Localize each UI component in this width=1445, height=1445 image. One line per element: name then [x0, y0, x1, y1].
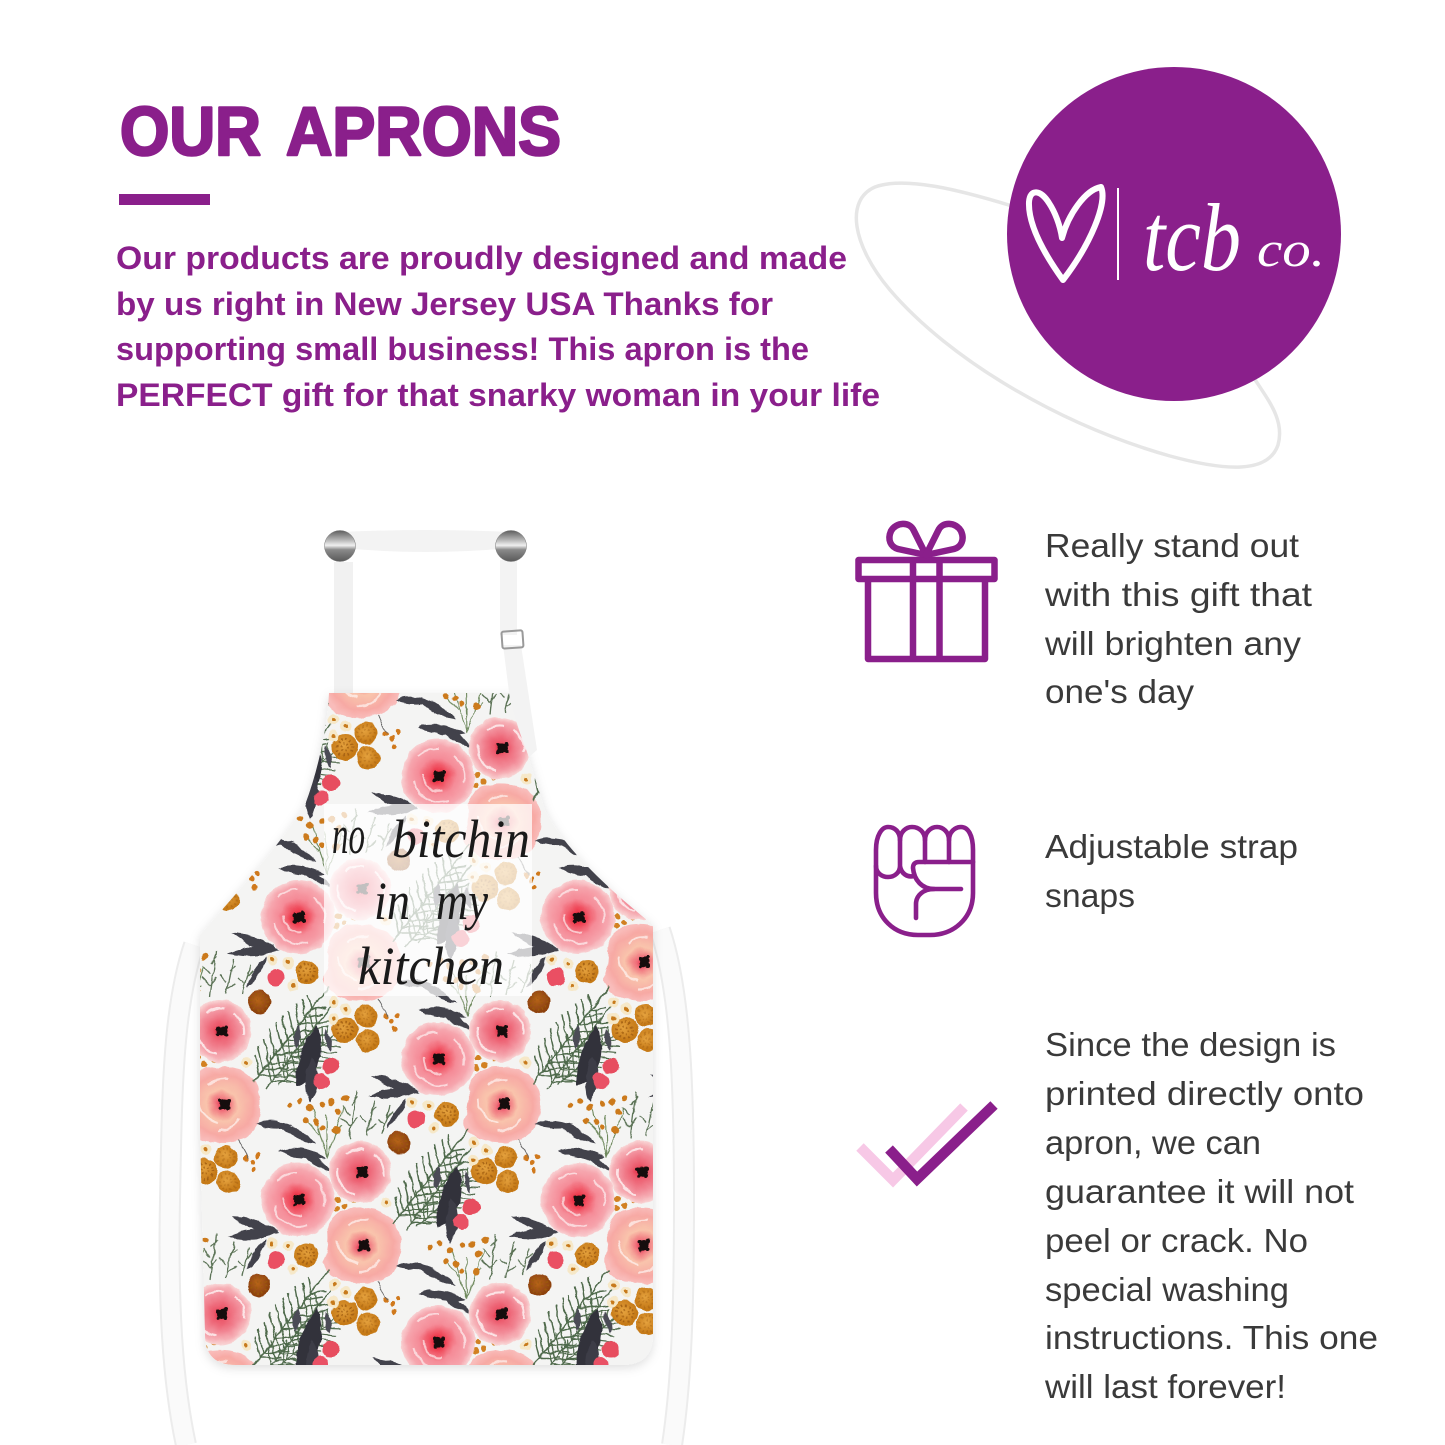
intro paragraph: by us right in New Jersey USA Thanks for: [116, 286, 773, 322]
feature text: print: special washing: [1045, 1271, 1289, 1308]
feature text: gift: [1044, 527, 1312, 710]
pocket slogan: no: [332, 805, 365, 865]
right strap with buckle: [501, 630, 537, 757]
logo badge: co.: [1257, 221, 1325, 277]
feature text: gift: with this gift that: [1044, 576, 1312, 613]
pocket slogan: kitchen: [358, 936, 504, 996]
feature text: print: instructions. This one: [1045, 1319, 1378, 1356]
icon: double check marks: [860, 1105, 994, 1180]
pocket slogan: in: [374, 871, 410, 931]
feature text: print: apron, we can: [1045, 1124, 1261, 1161]
feature text: print: will last forever!: [1044, 1368, 1286, 1405]
feature text: print: guarantee it will not: [1045, 1173, 1354, 1210]
intro paragraph: [116, 240, 880, 413]
apron ties: [170, 930, 684, 1445]
feature text: print: printed directly onto: [1045, 1075, 1364, 1112]
feature text: gift: Really stand out: [1045, 527, 1299, 564]
apron body with floral print: [197, 693, 656, 1371]
title: APRONS: [286, 93, 561, 170]
feature text: gift: will brighten any: [1044, 625, 1302, 662]
feature text: print: [1044, 1026, 1378, 1405]
intro paragraph: Our products are proudly designed and made: [116, 240, 847, 276]
feature text: print: Since the design is: [1045, 1026, 1336, 1063]
intro paragraph: PERFECT gift for that snarky woman in your life: [116, 377, 880, 413]
feature text: gift: one's day: [1045, 673, 1195, 710]
logo badge: [1007, 67, 1341, 401]
apron: [0, 526, 830, 1445]
intro paragraph: supporting small business! This apron is the: [116, 331, 809, 367]
pocket slogan: my: [436, 871, 488, 931]
icon: heart: [1029, 187, 1103, 280]
icon: fist: [876, 827, 973, 935]
feature text: strap: snaps: [1045, 877, 1135, 914]
icon: gift box: [858, 524, 994, 659]
pocket slogan: bitchin: [392, 809, 530, 869]
metal knobs: [324, 530, 526, 562]
logo badge: tcb: [1143, 184, 1241, 291]
title underline: [119, 194, 210, 205]
decorative orbit outline: [856, 183, 1280, 467]
feature text: strap: [1045, 828, 1298, 914]
pocket slogan: [332, 805, 530, 996]
title: OUR: [120, 93, 261, 170]
neck strap: [334, 530, 517, 696]
pocket: [324, 804, 532, 996]
feature text: strap: Adjustable strap: [1045, 828, 1298, 865]
title: [120, 93, 561, 170]
feature text: print: peel or crack. No: [1045, 1222, 1308, 1259]
